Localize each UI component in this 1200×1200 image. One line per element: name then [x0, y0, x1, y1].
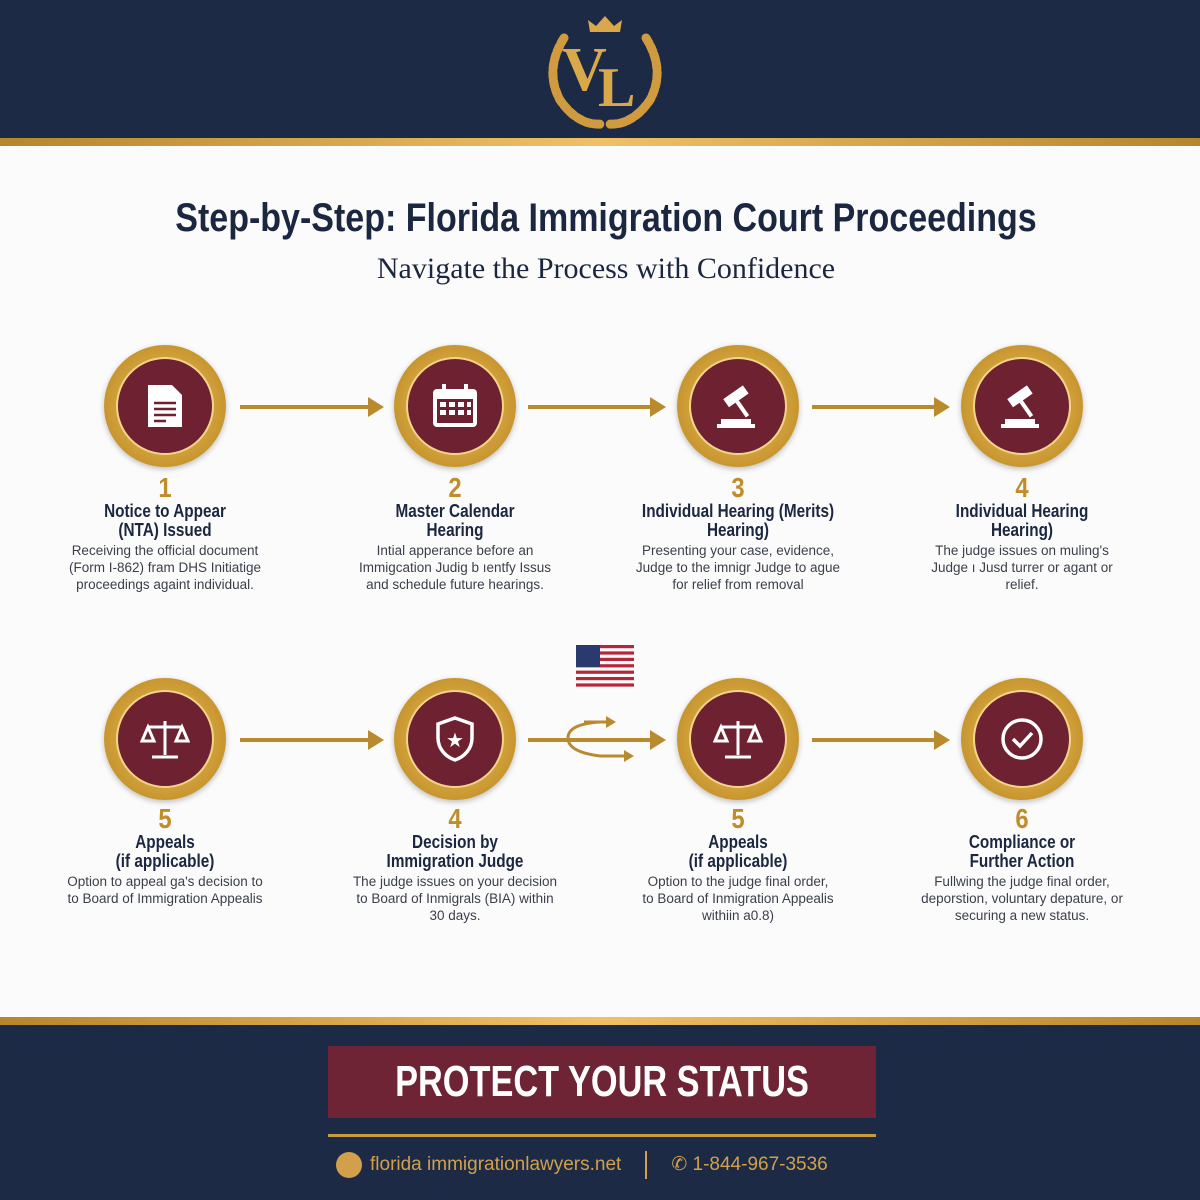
icon: loop arrows: [566, 716, 634, 762]
title: Step-by-Step: Florida Immigration Court Proceedings: [175, 196, 1037, 240]
step 5a text: (if applicable): [116, 851, 214, 871]
header band: [0, 0, 1200, 138]
step 5a text: Option to appeal ga's decision to: [67, 874, 263, 889]
step 4b text: to Board of Inmigrals (BIA) within: [356, 891, 554, 906]
step 4b text: Immigration Judge: [387, 851, 523, 871]
step 6 text: Further Action: [970, 851, 1074, 871]
step 4b text: 4: [448, 803, 462, 834]
step 1 text: 1: [158, 472, 172, 503]
step 4b circle: ★: [446, 730, 464, 752]
gold stripe footer: [0, 1017, 1200, 1025]
arrow 5-4: [240, 738, 380, 742]
step 4b text: [353, 803, 557, 923]
step 4 text: [931, 472, 1113, 592]
step 2 text: and schedule future hearings.: [366, 577, 544, 592]
step 2 text: Hearing: [427, 520, 483, 540]
step 6 text: [921, 803, 1123, 923]
step 1 text: proceedings againt individual.: [76, 577, 254, 592]
contact line: florida immigrationlawyers.net ✆ 1-844-967-3536: [370, 1154, 828, 1175]
step 3 text: 3: [731, 472, 745, 503]
step 4b text: The judge issues on your decision: [353, 874, 557, 889]
step 5a text: [67, 803, 263, 906]
step 1 text: [69, 472, 261, 592]
step 5a text: Appeals: [135, 832, 195, 852]
step 4b text: Decision by: [412, 832, 498, 852]
arrow 4-5: [528, 738, 662, 742]
arrow 3-4: [812, 405, 946, 409]
CTA button: PROTECT YOUR STATUS: [395, 1057, 809, 1106]
step 1 text: (Form I-862) fram DHS Initiatige: [69, 560, 261, 575]
step 5b text: withiin a0.8): [702, 908, 774, 923]
step 3 text: Individual Hearing (Merits): [642, 501, 834, 521]
icon: US flag: [576, 645, 634, 687]
step 3 text: Hearing): [707, 520, 769, 540]
step 6 circle: [961, 678, 1083, 800]
step 4b text: 30 days.: [429, 908, 481, 923]
step 6 text: deporstion, voluntary depature, or: [921, 891, 1123, 906]
step 3 circle: [677, 345, 799, 467]
step 5a text: to Board of Immigration Appealis: [67, 891, 263, 906]
step 2 circle: [394, 345, 516, 467]
step 1 text: Notice to Appear: [104, 501, 226, 521]
step 5b text: Option to the judge final order,: [648, 874, 828, 889]
step 2 text: Intial apperance before an: [377, 543, 533, 558]
step 4 text: Judge ı Jusd turrer or agant or: [931, 560, 1113, 575]
step 5b text: [642, 803, 834, 923]
step 4 text: Individual Hearing: [956, 501, 1088, 521]
step 2 text: 2: [448, 472, 462, 503]
gold stripe: [0, 138, 1200, 146]
step 4 text: 4: [1015, 472, 1029, 503]
step 1 text: (NTA) Issued: [118, 520, 212, 540]
step 5b text: Appeals: [708, 832, 768, 852]
step 3 text: Presenting your case, evidence,: [642, 543, 834, 558]
step 4 text: Hearing): [991, 520, 1053, 540]
CTA button: [328, 1046, 876, 1118]
step 5b text: 5: [731, 803, 745, 834]
step 4 text: The judge issues on muling's: [935, 543, 1109, 558]
subtitle: Navigate the Process with Confidence: [377, 252, 835, 285]
step 2 text: [359, 472, 551, 592]
step 5a circle: [104, 678, 226, 800]
logo: L: [598, 57, 635, 119]
step 6 text: 6: [1015, 803, 1029, 834]
step 5a text: 5: [158, 803, 172, 834]
footer band: [0, 1025, 1200, 1200]
step 4 circle: [961, 345, 1083, 467]
arrow 2-3: [528, 405, 662, 409]
step 4b circle: [394, 678, 516, 800]
step 3 text: [636, 472, 840, 592]
step 3 text: for relief from removal: [672, 577, 804, 592]
step 5b text: to Board of Inmigration Appealis: [642, 891, 834, 906]
arrow 5-6: [812, 738, 946, 742]
step 1 circle: [104, 345, 226, 467]
step 6 text: Compliance or: [969, 832, 1075, 852]
step 6 text: Fullwing the judge final order,: [934, 874, 1110, 889]
step 6 text: securing a new status.: [955, 908, 1089, 923]
step 4 text: relief.: [1005, 577, 1038, 592]
step 5b circle: [677, 678, 799, 800]
logo: V: [562, 36, 607, 104]
step 3 text: Judge to the imnigr Judge to ague: [636, 560, 840, 575]
step 2 text: Immigcation Judig b ıentfy Issus: [359, 560, 551, 575]
contact line: [336, 1151, 828, 1179]
logo: [548, 16, 662, 129]
arrow 1-2: [240, 405, 380, 409]
step 5b text: (if applicable): [689, 851, 787, 871]
step 2 text: Master Calendar: [395, 501, 515, 521]
step 1 text: Receiving the official document: [72, 543, 258, 558]
